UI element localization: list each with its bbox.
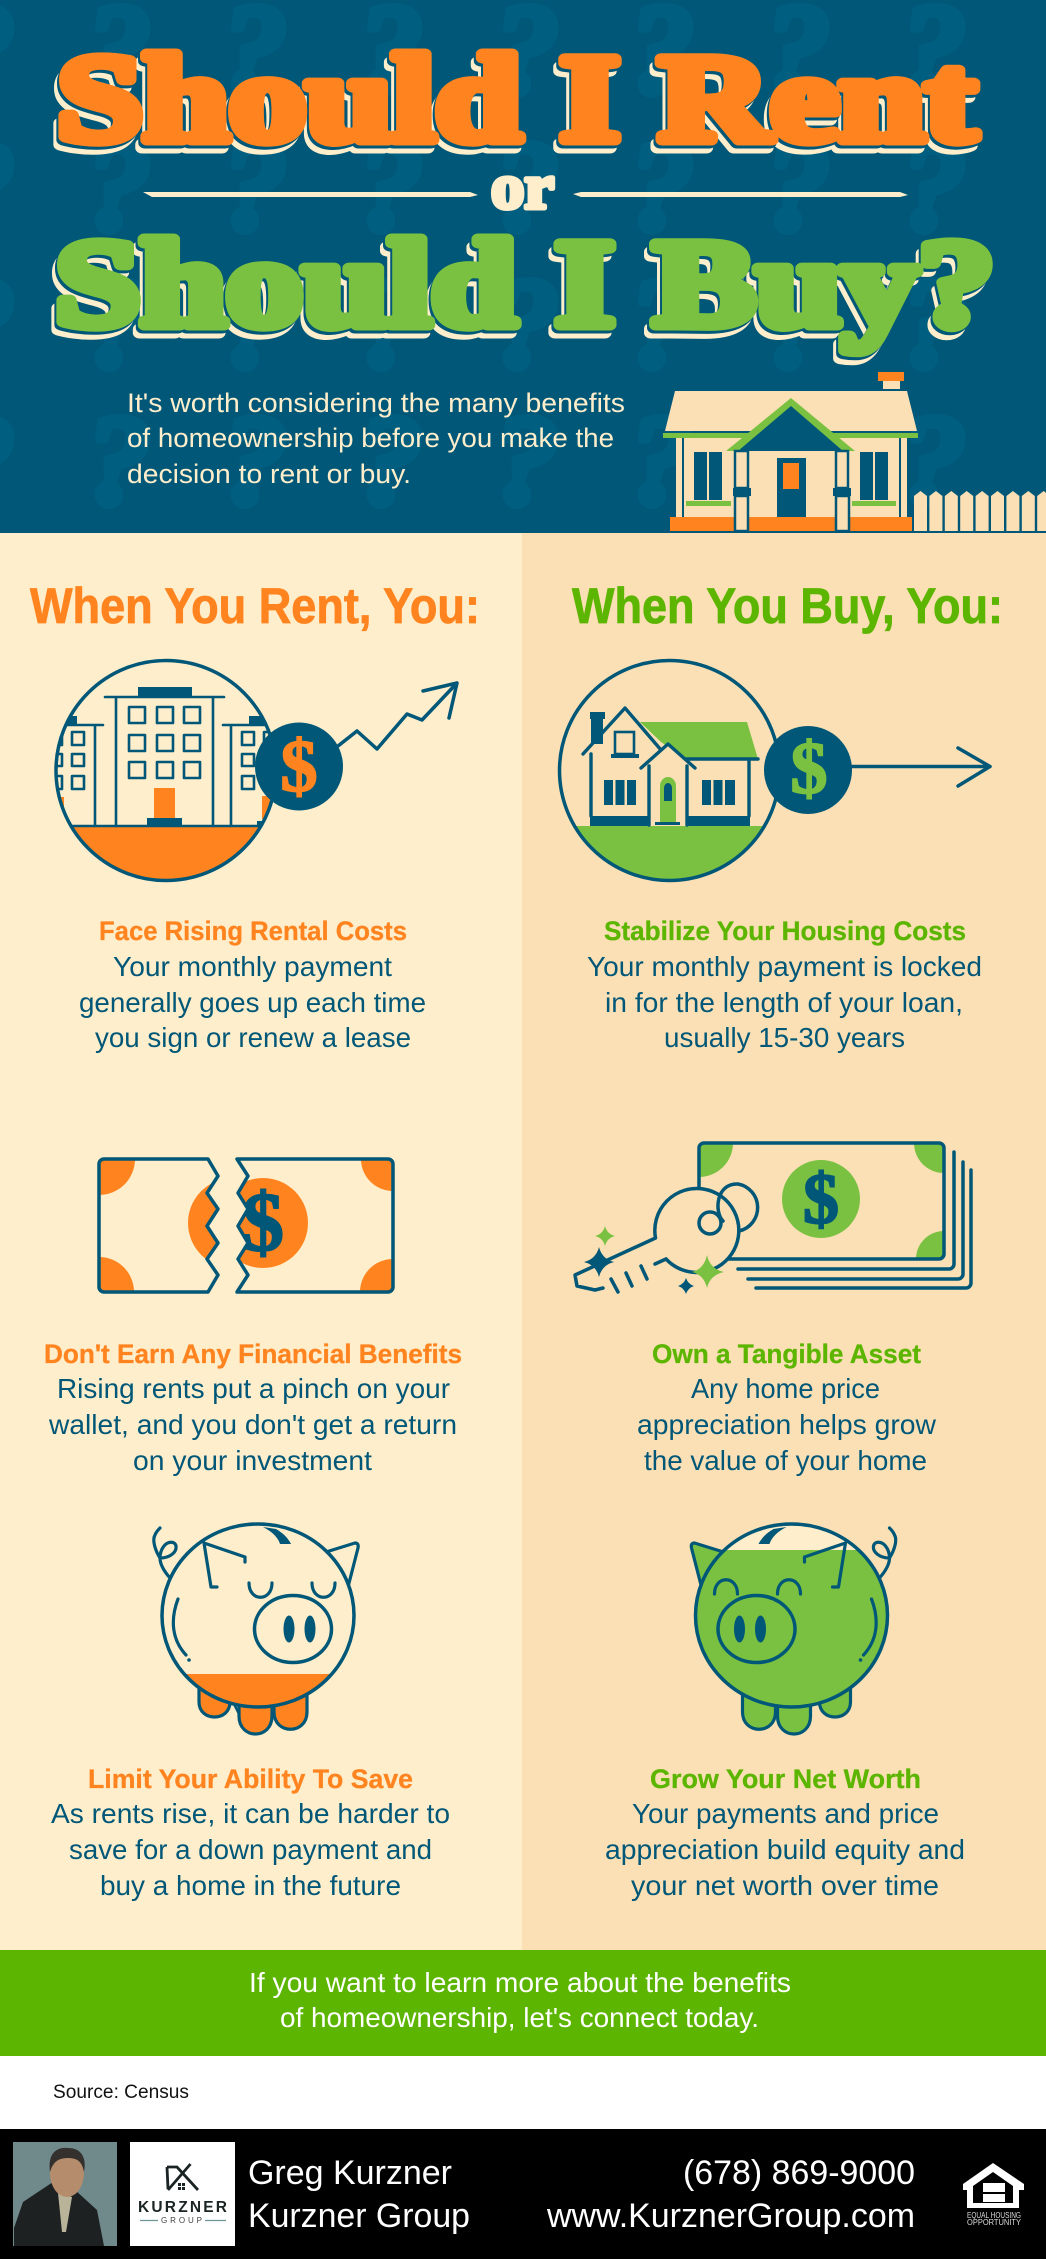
call to action banner [0, 1950, 1046, 2056]
text block: Limit Your Ability To Save: As rents rise, it can be harder to [51, 1798, 450, 1829]
text block: Don't Earn Any Financial Benefits: on your investment [133, 1445, 372, 1476]
icon: house in circle with stable cost [550, 660, 990, 886]
text block: Stabilize Your Housing Costs: Stabilize Your Housing Costs [604, 916, 966, 946]
text block: Stabilize Your Housing Costs: usually 15-30 years [664, 1022, 905, 1053]
header background [0, 0, 1046, 533]
contact name and company: Greg Kurzner [248, 2154, 452, 2192]
text block: Own a Tangible Asset: Own a Tangible Asset [652, 1339, 921, 1369]
text block: Face Rising Rental Costs: Your monthly payment [113, 951, 392, 982]
panel: rent column background [0, 533, 522, 1950]
intro text: decision to rent or buy. [127, 459, 411, 489]
icon: green piggy bank nearly full [691, 1524, 896, 1734]
heading: When You Rent: When You Rent, You: [30, 578, 480, 634]
icon: key and stack of bills: $ [803, 1159, 839, 1239]
text block: Own a Tangible Asset [637, 1339, 937, 1476]
question mark background pattern [0, 0, 966, 531]
icon: torn dollar bill: $ [242, 1176, 284, 1269]
title: Should I Buy?: Should I Buy? [55, 216, 995, 353]
text block: Grow Your Net Worth: appreciation build equity and [605, 1834, 965, 1865]
text block: Face Rising Rental Costs [79, 916, 426, 1053]
heading: When You Buy: When You Buy, You: [572, 578, 1003, 634]
contact phone and website: (678) 869-9000 [683, 2154, 915, 2192]
text block: Face Rising Rental Costs: Face Rising Rental Costs [99, 916, 407, 946]
company logo [130, 2142, 235, 2246]
contact phone and website [546, 2154, 915, 2235]
text block: Limit Your Ability To Save: buy a home in the future [100, 1870, 401, 1901]
intro text [127, 388, 625, 489]
footer bar [0, 2129, 1046, 2259]
contact name and company: Kurzner Group [248, 2197, 470, 2235]
icon: header house with fence [663, 372, 1046, 531]
title: or with dividers [143, 151, 908, 222]
icon: apartment buildings in circle with rising cost: $ [280, 726, 318, 808]
contact name and company [248, 2154, 470, 2235]
text block: Don't Earn Any Financial Benefits [44, 1339, 462, 1476]
text block: Limit Your Ability To Save: save for a down payment and [69, 1834, 432, 1865]
icon: key and stack of bills [573, 1141, 973, 1294]
icon: torn dollar bill [97, 1157, 395, 1294]
text block: Stabilize Your Housing Costs [587, 916, 982, 1053]
text block: Limit Your Ability To Save: Limit Your Ability To Save [88, 1764, 413, 1794]
text block: Grow Your Net Worth [605, 1764, 965, 1901]
company logo: KURZNER [138, 2199, 227, 2216]
source note: Source: Census [53, 2082, 189, 2103]
text block: Own a Tangible Asset: Any home price [691, 1373, 880, 1404]
icon: house in circle with stable cost: $ [790, 728, 828, 810]
intro text: It's worth considering the many benefits [127, 388, 625, 418]
intro text: of homeownership before you make the [127, 423, 614, 453]
text block: Own a Tangible Asset: appreciation helps grow [637, 1409, 937, 1440]
text block: Grow Your Net Worth: Grow Your Net Worth [650, 1764, 921, 1794]
icon: equal housing opportunity: EQUAL HOUSING [967, 2211, 1021, 2220]
call to action banner: If you want to learn more about the benefits [249, 1967, 791, 1998]
text block: Own a Tangible Asset: the value of your home [644, 1445, 927, 1476]
company logo: GROUP [161, 2216, 202, 2225]
text block: Grow Your Net Worth: your net worth over time [631, 1870, 939, 1901]
text block: Face Rising Rental Costs: you sign or renew a lease [95, 1022, 411, 1053]
icon: equal housing opportunity: OPPORTUNITY [967, 2218, 1022, 2227]
panel: buy column background [522, 533, 1046, 1950]
icon: equal housing opportunity [963, 2163, 1024, 2227]
title: Should I Rent: Should I Rent [57, 30, 977, 167]
text block: Don't Earn Any Financial Benefits: wallet, and you don't get a return [48, 1409, 457, 1440]
title: or with dividers: or [491, 151, 554, 222]
text block: Stabilize Your Housing Costs: in for the length of your loan, [605, 987, 963, 1018]
text block: Stabilize Your Housing Costs: Your monthly payment is locked [587, 951, 982, 982]
text block: Don't Earn Any Financial Benefits: Don't Earn Any Financial Benefits [44, 1339, 462, 1369]
text block: Limit Your Ability To Save [51, 1764, 450, 1901]
text block: Don't Earn Any Financial Benefits: Rising rents put a pinch on your [57, 1373, 450, 1404]
icon: orange piggy bank nearly empty [154, 1524, 358, 1734]
text block: Face Rising Rental Costs: generally goes up each time [79, 987, 426, 1018]
icon: apartment buildings in circle with rising cost [50, 660, 457, 886]
agent photo [13, 2142, 117, 2246]
contact phone and website: www.KurznerGroup.com [546, 2197, 915, 2235]
call to action banner: of homeownership, let's connect today. [280, 2002, 759, 2033]
text block: Grow Your Net Worth: Your payments and price [632, 1798, 939, 1829]
